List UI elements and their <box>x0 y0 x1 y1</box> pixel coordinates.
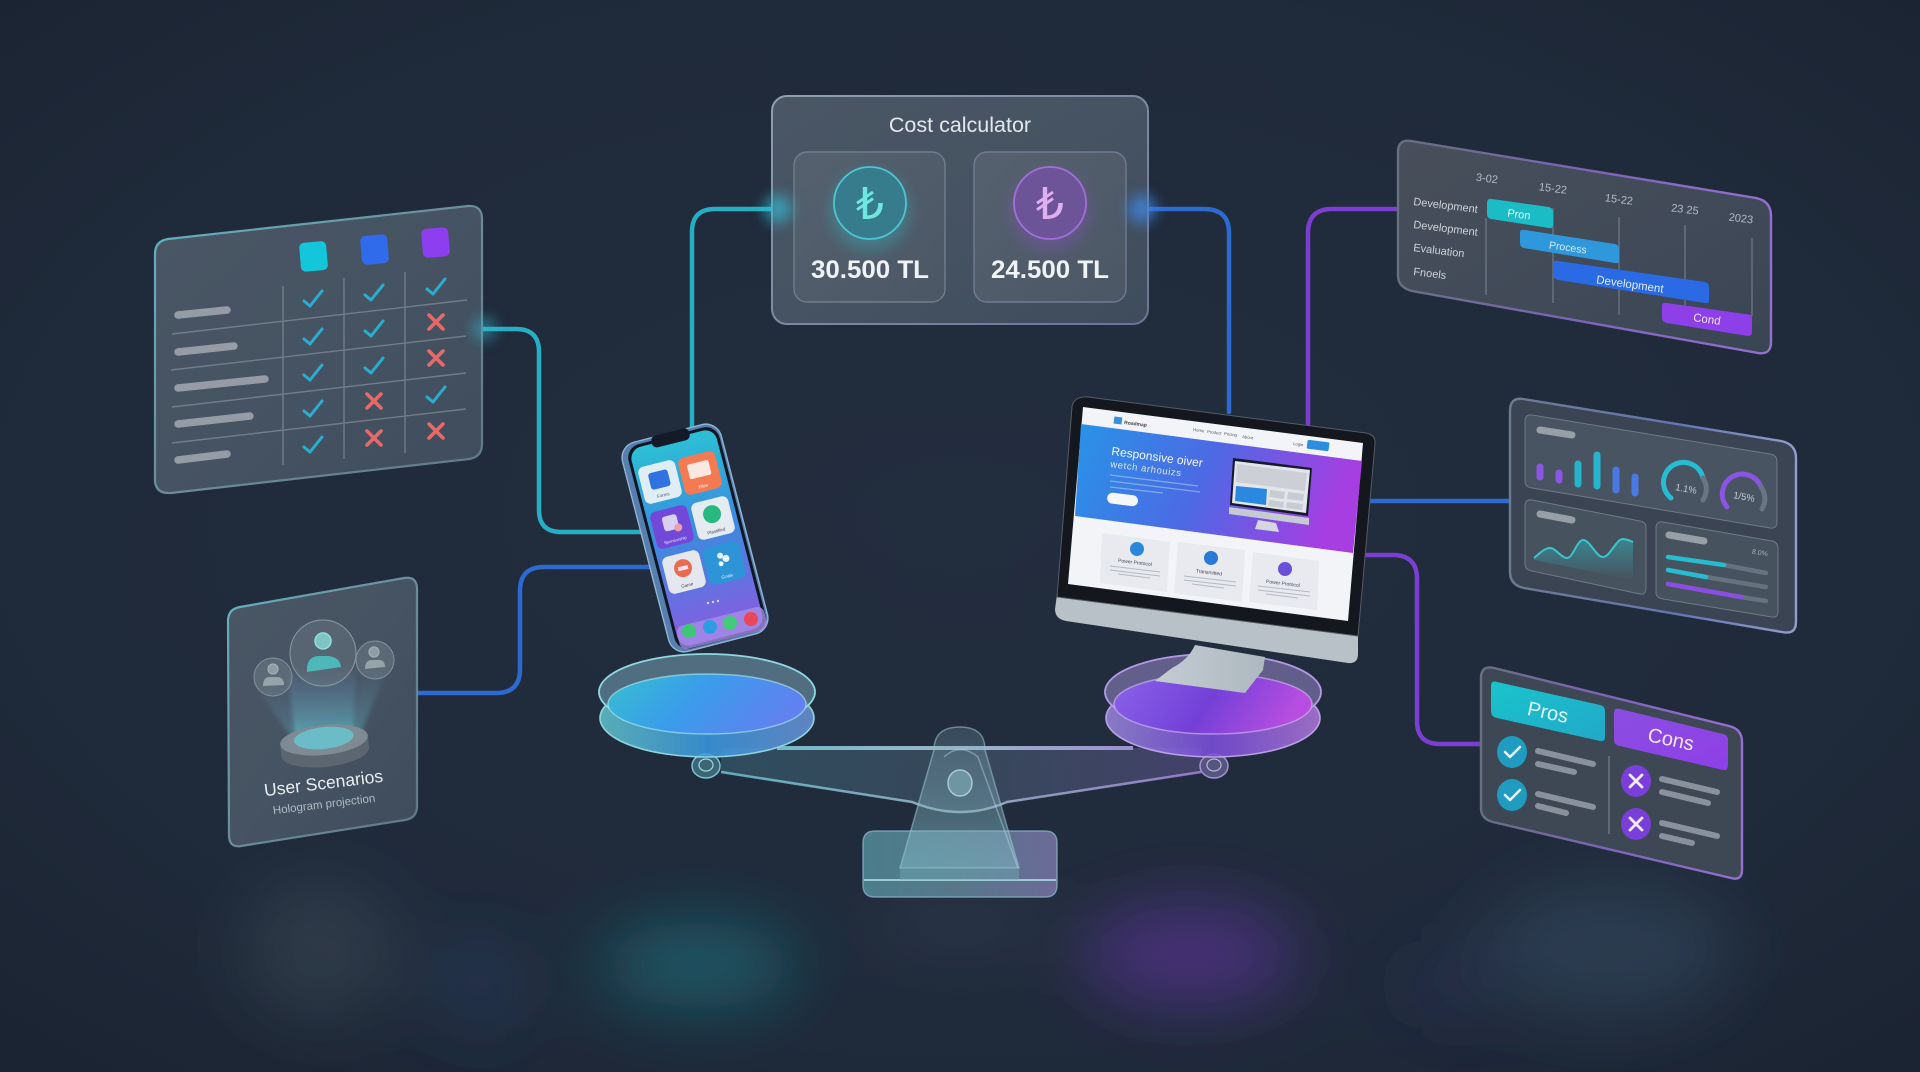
timeline date labels: 3-02 <box>1475 172 1499 186</box>
bar: Pron: Pron <box>1507 208 1531 222</box>
bar: Cond <box>1662 303 1752 336</box>
cons header: Cons <box>1646 724 1696 756</box>
price card: option A: ₺ <box>856 180 884 229</box>
row label bars <box>178 310 265 460</box>
cons header <box>1614 708 1728 770</box>
website feature card 1 <box>1100 533 1170 592</box>
website feature card 3: Power Protocol <box>1266 579 1300 589</box>
timeline row labels: Development <box>1413 196 1478 216</box>
column header: cyan swatch <box>299 241 328 272</box>
cross marks <box>367 315 443 445</box>
website hero subheading: wetch arhouizs <box>1109 459 1182 479</box>
hologram pedestal <box>279 720 371 771</box>
website nav: Home <box>1193 427 1205 433</box>
bar: Development: Development <box>1595 274 1665 296</box>
website hero heading: Responsive oiver <box>1111 444 1204 470</box>
app: Goals <box>701 540 747 586</box>
connector glows <box>472 195 1156 341</box>
connector: dashboard to monitor <box>1368 499 1510 503</box>
website nav: Roadmap <box>1124 420 1147 429</box>
floor reflections <box>240 880 1735 1035</box>
timeline date labels: 2023 <box>1728 212 1754 226</box>
gauge: cyan: 1.1% <box>1674 482 1698 497</box>
app: Sponsorship <box>649 504 695 550</box>
price card: option B: 24.500 TL <box>991 256 1109 284</box>
website nav: Product <box>1207 429 1223 436</box>
timeline row labels <box>1413 196 1478 282</box>
sub-panel: progress bars <box>1656 522 1778 617</box>
app: Plastified: Plastified <box>707 526 726 536</box>
table grid lines <box>171 272 467 465</box>
bar: Process <box>1520 230 1619 263</box>
left hook <box>692 754 720 778</box>
bar: Development <box>1553 261 1709 303</box>
pros header <box>1491 682 1605 741</box>
pros header: Pros <box>1525 698 1570 728</box>
price card: option B: ₺ <box>1036 180 1064 229</box>
website feature card 3 <box>1249 552 1319 610</box>
connector lines <box>417 209 1510 744</box>
heading: user scenarios: User Scenarios <box>263 766 384 800</box>
monitor bezel <box>1057 397 1375 636</box>
connector: comparison table to phone <box>482 329 640 532</box>
app: Plastified <box>690 495 736 541</box>
timeline row labels: Evaluation <box>1413 242 1465 260</box>
check marks <box>304 279 445 452</box>
mini monitor illustration <box>1229 458 1312 532</box>
right pan <box>1105 654 1321 757</box>
phone dock <box>675 605 769 651</box>
website hero <box>1075 424 1362 553</box>
website feature card 1: Power Protocol <box>1118 558 1152 568</box>
website hero button <box>1107 492 1139 507</box>
website nav: Login <box>1293 441 1304 447</box>
divider <box>1608 756 1610 834</box>
app: Forms <box>637 459 683 505</box>
app: Game <box>661 549 707 595</box>
website nav: Pricing <box>1224 431 1238 438</box>
website hero copy <box>1110 475 1200 493</box>
gauge: cyan <box>1663 462 1706 500</box>
price card: option B <box>974 152 1126 302</box>
app: Files <box>677 450 723 496</box>
column header: purple swatch <box>421 227 450 258</box>
timeline date labels: 15-22 <box>1538 181 1568 197</box>
connector: timeline to monitor <box>1308 209 1400 424</box>
connector: user scenarios to phone <box>417 567 652 693</box>
timeline grid lines <box>1486 208 1752 316</box>
bar: Process: Process <box>1548 239 1587 257</box>
pros items <box>1497 736 1593 813</box>
panel: cost calculator <box>772 96 1148 324</box>
app: Sponsorship: Sponsorship <box>663 535 688 545</box>
app: Game: Game <box>681 581 694 589</box>
price card: option A <box>794 152 945 302</box>
gauge: purple <box>1722 474 1765 509</box>
monitor <box>1055 397 1375 693</box>
panel: project timeline <box>1398 141 1771 353</box>
price card: option A: 30.500 TL <box>811 256 929 284</box>
left pan <box>599 654 815 757</box>
panel: user scenarios <box>228 578 417 846</box>
timeline date labels: 23 25 <box>1670 202 1699 218</box>
phone body <box>619 421 771 655</box>
sub-heading: hologram projection: Hologram projection <box>272 793 376 817</box>
balance scale <box>599 654 1321 897</box>
app: Goals: Goals <box>721 572 734 580</box>
connector: pros and cons to monitor <box>1366 555 1482 744</box>
bar: Cond: Cond <box>1692 312 1721 328</box>
connector: cost calculator to phone <box>692 209 772 432</box>
panel: analytics dashboard <box>1510 399 1796 633</box>
website nav <box>1114 417 1330 451</box>
timeline date labels <box>1475 172 1754 226</box>
monitor stand <box>1155 645 1265 693</box>
heading: cost calculator: Cost calculator <box>889 113 1031 137</box>
hologram light beams <box>258 668 388 738</box>
column header: blue swatch <box>360 234 389 265</box>
website nav: About <box>1242 434 1254 440</box>
right hook <box>1200 754 1228 778</box>
app: Files: Files <box>698 482 709 490</box>
scale beam <box>721 748 1201 812</box>
panel: comparison table <box>155 206 482 493</box>
sub-panel: progress bars: 8.0% <box>1751 549 1768 558</box>
phone screen <box>625 424 769 652</box>
phone notch <box>650 427 691 448</box>
timeline row labels: Fnoels <box>1413 266 1447 282</box>
website feature card 2 <box>1174 542 1245 602</box>
monitor screen <box>1068 407 1363 621</box>
panel: pros and cons <box>1481 667 1742 879</box>
timeline row labels: Development <box>1413 219 1478 239</box>
sub-panel: line chart <box>1525 500 1646 594</box>
sub-panel: bars and gauges <box>1525 415 1777 528</box>
page dots <box>707 600 719 604</box>
bar chart <box>1540 455 1635 493</box>
app: Forms: Forms <box>656 491 671 499</box>
monitor chin <box>1055 594 1358 663</box>
gauge: purple: 1/5% <box>1732 490 1756 505</box>
timeline date labels: 15-22 <box>1604 192 1634 208</box>
cons items <box>1621 765 1717 843</box>
scale pivot pillar <box>900 727 1019 880</box>
website feature card 2: Transmitted <box>1196 568 1222 578</box>
connector: cost calculator to monitor <box>1148 209 1229 412</box>
bar: Pron <box>1487 199 1553 228</box>
scale base <box>863 831 1057 897</box>
hologram avatars <box>254 620 394 696</box>
phone <box>619 421 771 655</box>
